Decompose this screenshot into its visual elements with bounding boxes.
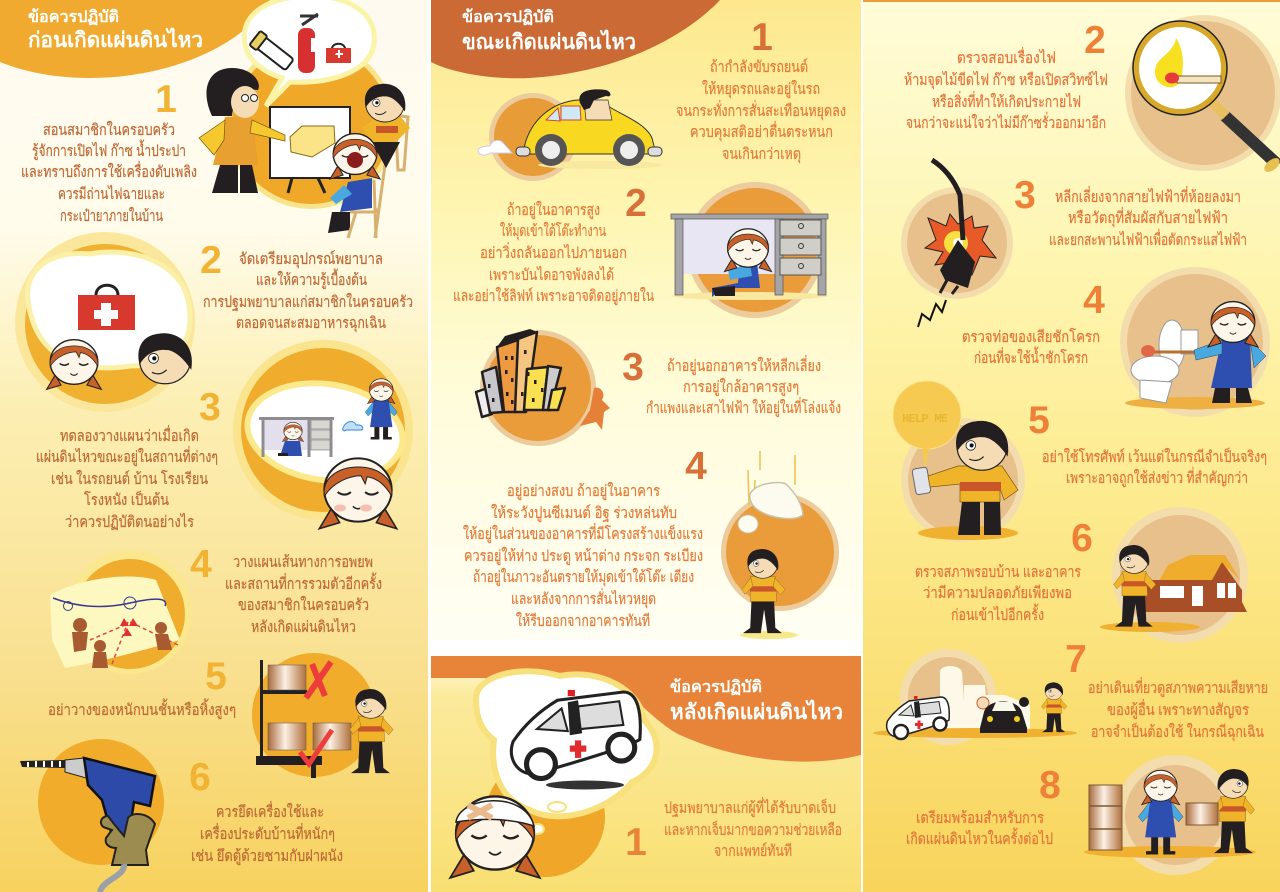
- panel: before the earthquake: [0, 0, 413, 892]
- illustration: storing supplies: [1084, 755, 1256, 875]
- text: step 3: [646, 355, 841, 418]
- text: step 1: รู้จักการเปิดไฟ ก๊าซ น้ำประปา: [32, 139, 186, 161]
- text: step 1: ควบคุมสติอย่าตื่นตระหนก: [690, 121, 833, 142]
- text: step 6: ว่ามีความปลอดภัยเพียงพอ: [923, 585, 1072, 602]
- text: step 6: [191, 801, 343, 866]
- text: step 8: เตรียมพร้อมสำหรับการ: [916, 810, 1044, 827]
- number 2: 2: [1084, 19, 1106, 62]
- text: step 2: เพราะบันไดอาจพังลงได้: [489, 266, 614, 284]
- text: step 3: ถ้าอยู่นอกอาคารให้หลีกเลี่ยง: [667, 355, 821, 376]
- illustration: evacuation route map: [50, 550, 192, 674]
- number 1: 1: [155, 78, 177, 121]
- heading: before earthquake: [0, 0, 270, 78]
- text: step 3: หรือวัตถุที่สัมผัสกับสายไฟฟ้า: [1068, 207, 1228, 228]
- illustration: boy inspecting house: [1100, 507, 1248, 643]
- number 1: 1: [625, 821, 647, 864]
- number 8: 8: [1039, 764, 1061, 807]
- text: step 4: [962, 328, 1100, 367]
- text: step 1: ควรมีถ่านไฟฉายและ: [58, 185, 165, 203]
- text: step 2: ให้มุดเข้าใต้โต๊ะทำงาน: [500, 222, 606, 241]
- text: step 6: ควรยึดเครื่องใช้และ: [216, 801, 324, 821]
- heading: before earthquake: ก่อนเกิดแผ่นดินไหว: [28, 27, 203, 52]
- text: step 2: และอย่าใช้ลิฟท์ เพราะอาจติดอยู่ภายใน: [453, 287, 654, 306]
- text: step 2: ตลอดจนสะสมอาหารฉุกเฉิน: [236, 315, 386, 333]
- text: step 3: [1049, 186, 1247, 249]
- text: step 2: การปฐมพยาบาลแก่สมาชิกในครอบครัว: [203, 293, 413, 311]
- text: step 2: จัดเตรียมอุปกรณ์พยาบาล: [239, 250, 383, 269]
- text: step 7: [1088, 677, 1268, 742]
- text: step 7: ของผู้อื่น เพราะทางสัญจร: [1107, 699, 1249, 720]
- heading: after earthquake: [431, 656, 861, 762]
- number 4: 4: [1083, 279, 1105, 322]
- panel: after the earthquake continued: [873, 15, 1280, 875]
- text: step 4: อยู่อย่างสงบ ถ้าอยู่ในอาคาร: [507, 482, 660, 501]
- text: step 3: หลีกเลี่ยงจากสายไฟฟ้าที่ห้อยลงมา: [1055, 186, 1241, 206]
- text: step 2: หรือสิ่งที่ทำให้เกิดประกายไฟ: [932, 91, 1081, 111]
- text: step 5: อย่าวางของหนักบนชั้นหรือหิ้งสูงๆ: [48, 698, 236, 720]
- text: step 2: [453, 201, 654, 306]
- text: step 3: การอยู่ใกล้อาคารสูงๆ: [683, 378, 799, 397]
- text: step 4: วางแผนเส้นทางการอพยพ: [233, 554, 373, 571]
- text: step 6: ก่อนเข้าไปอีกครั้ง: [951, 603, 1044, 624]
- text: step 2: จนกว่าจะแน่ใจว่าไม่มีก๊าซรั่วออกมาอีก: [906, 112, 1106, 132]
- text: step 4: ของสมาชิกในครอบครัว: [238, 596, 369, 614]
- heading: after earthquake: หลังเกิดแผ่นดินไหว: [670, 699, 843, 724]
- text: after step 1: ปฐมพยาบาลแก่ผู้ที่ได้รับบาดเจ็บ: [664, 797, 836, 818]
- illustration: broken plug and sparks: [901, 160, 1013, 327]
- text: step 4: ให้อยู่ในส่วนของอาคารที่มีโครงสร้างแข็งแรง: [463, 523, 703, 544]
- text: step 4: และหลังจากการสั่นไหวหยุด: [511, 588, 656, 609]
- illustration: boy with phone, help bubble: [893, 381, 1025, 542]
- text: step 1: จนกระทั่งการสั่นสะเทือนหยุดลง: [676, 100, 846, 121]
- text: step 3: แผ่นดินไหวขณะอยู่ในสถานที่ต่างๆ: [36, 446, 218, 467]
- text: step 2: [203, 250, 413, 333]
- illustration: buildings: [476, 329, 610, 446]
- heading: after earthquake: ข้อควรปฏิบัติ: [670, 678, 762, 696]
- heading: during earthquake: ข้อควรปฏิบัติ: [462, 8, 554, 26]
- text: after step 1: จากแพทย์ทันที: [714, 842, 792, 860]
- number 3: 3: [1014, 174, 1036, 217]
- text: step 4: ก่อนที่จะใช้น้ำชักโครก: [974, 346, 1088, 367]
- text: step 4: ตรวจท่อของเสียชักโครก: [962, 328, 1100, 346]
- text: step 1: และทราบถึงการใช้เครื่องดับเพลิง: [21, 161, 197, 181]
- text: step 6: เครื่องประดับบ้านที่หนักๆ: [200, 823, 335, 843]
- text: step 6: [915, 564, 1081, 624]
- text: step 3: กำแพงและเสาไฟฟ้า ให้อยู่ในที่โล่งแจ้ง: [646, 397, 841, 418]
- illustration: child under desk: [671, 182, 828, 318]
- number 4: 4: [190, 543, 212, 586]
- text: step 1: ให้หยุดรถและอยู่ในรถ: [702, 80, 820, 99]
- number 3: 3: [622, 346, 644, 389]
- text: step 8: เกิดแผ่นดินไหวในครั้งต่อไป: [906, 827, 1053, 848]
- text: step 2: [904, 47, 1108, 132]
- text: after step 1: และหากเจ็บมากขอความช่วยเหลือ: [664, 820, 842, 839]
- text: step 2: ถ้าอยู่ในอาคารสูง: [507, 201, 600, 220]
- text: step 8: [906, 810, 1053, 848]
- illustration: first aid thought cloud: [15, 232, 195, 412]
- heading: before earthquake: ข้อควรปฏิบัติ: [28, 8, 119, 26]
- heading: during earthquake: ขณะเกิดแผ่นดินไหว: [462, 29, 636, 54]
- illustration: ambulance, car and onlookers: [873, 649, 1077, 745]
- number 6: 6: [189, 756, 211, 799]
- text: step 3: ว่าควรปฏิบัติตนอย่างไร: [65, 513, 194, 531]
- illustration: car: [478, 89, 662, 181]
- number 2: 2: [200, 239, 222, 282]
- text: step 4: [225, 554, 382, 636]
- text: step 3: เช่น ในรถยนต์ บ้าน โรงเรียน: [51, 470, 208, 488]
- text: step 4: หลังเกิดแผ่นดินไหว: [251, 618, 356, 636]
- text: step 2: ห้ามจุดไม้ขีดไฟ ก๊าซ หรือเปิดสวิทซ์ไฟ: [904, 71, 1108, 90]
- text: step 4: ควรอยู่ให้ห่าง ประตู หน้าต่าง กระจก ระเบียง: [464, 547, 703, 566]
- number 7: 7: [1065, 638, 1087, 681]
- text: step 5: [1042, 447, 1267, 488]
- text: step 1: [21, 121, 197, 225]
- number 4: 4: [685, 445, 707, 488]
- text: step 4: [463, 482, 703, 630]
- number 5: 5: [205, 655, 227, 698]
- text: after step 1: [664, 797, 842, 860]
- text: step 1: สอนสมาชิกในครอบครัว: [43, 121, 175, 139]
- text: step 6: ตรวจสภาพรอบบ้าน และอาคาร: [915, 564, 1081, 581]
- text: step 4: ให้ระวังปูนซีเมนต์ อิฐ ร่วงหล่นทับ: [491, 504, 677, 523]
- text: step 3: โรงหนัง เป็นต้น: [84, 490, 169, 509]
- number 6: 6: [1071, 517, 1093, 560]
- illustration: magnifier and match: [1125, 15, 1280, 175]
- text: step 4: ให้รีบออกจากอาคารทันที: [516, 612, 650, 630]
- text: step 1: ถ้ากำลังขับรถยนต์: [710, 58, 808, 76]
- illustration: boy and falling debris: [721, 451, 839, 639]
- text: step 4: ถ้าอยู่ในภาวะอันตรายให้มุดเข้าใต้โต๊ะ เตียง: [473, 568, 694, 587]
- text: step 1: กระเป๋ายาภายในบ้าน: [60, 207, 163, 225]
- illustration: boy with phone, help bubble: HELP ME: [902, 412, 948, 426]
- number 3: 3: [199, 386, 221, 429]
- text: step 3: [36, 425, 218, 531]
- text: step 1: จนเกินกว่าเหตุ: [722, 146, 801, 164]
- text: step 2: ตรวจสอบเรื่องไฟ: [957, 47, 1056, 67]
- number 5: 5: [1028, 399, 1050, 442]
- panel: during the earthquake: [431, 0, 861, 878]
- illustration: drill: [20, 739, 164, 892]
- number 1: 1: [751, 16, 773, 59]
- text: step 1: [676, 58, 846, 164]
- heading: during earthquake: [431, 0, 720, 78]
- illustration: ambulance thought cloud and injured girl: [450, 671, 656, 878]
- number 2: 2: [625, 182, 647, 225]
- illustration: family learning with emergency kit: [199, 0, 410, 238]
- text: step 2: อย่าวิ่งถลันออกไปภายนอก: [480, 242, 627, 262]
- text: step 4: และสถานที่การรวมตัวอีกครั้ง: [225, 572, 382, 593]
- text: step 3: ทดลองวางแผนว่าเมื่อเกิด: [60, 425, 199, 445]
- illustration: practising shelter under desk: [233, 340, 413, 529]
- illustration: girl checking toilet: [1120, 267, 1270, 417]
- illustration: heavy objects on shelves: [252, 653, 393, 778]
- text: step 6: เช่น ยึดตู้ด้วยชามกับฝาผนัง: [191, 848, 343, 866]
- text: step 2: และให้ความรู้เบื้องต้น: [256, 268, 367, 290]
